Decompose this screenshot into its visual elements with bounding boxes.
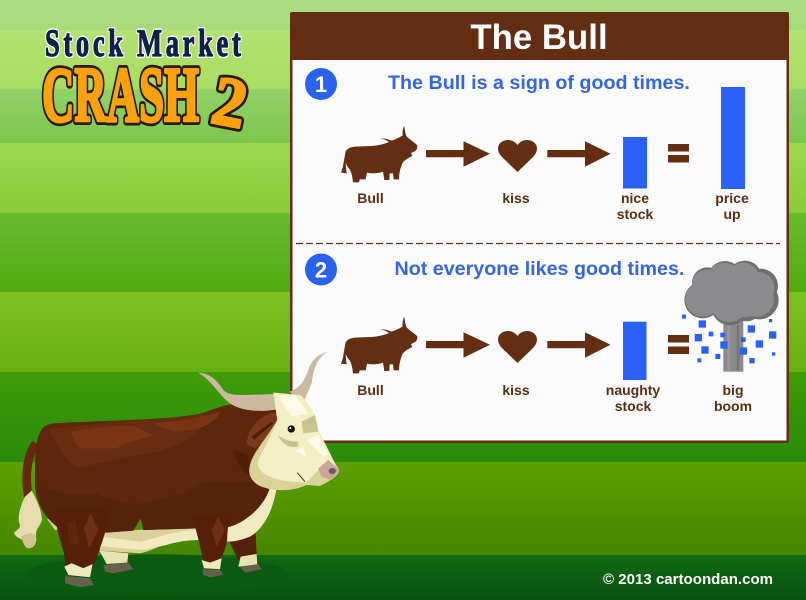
label: big boom: big <box>722 382 744 398</box>
bull illustration <box>14 352 339 594</box>
number badge 2: 2 <box>315 258 327 282</box>
label: kiss: kiss <box>502 190 530 206</box>
label: naughty stock: stock <box>615 398 651 414</box>
panel: The Bull <box>290 12 789 443</box>
label: naughty stock: naughty <box>606 382 660 398</box>
icon: bull silhouette <box>341 317 417 373</box>
arrow <box>547 332 610 358</box>
logo numeral 2: 2 <box>206 61 254 143</box>
game logo <box>42 22 254 143</box>
label: Bull: Bull <box>357 190 384 206</box>
bar: nice stock <box>623 137 647 188</box>
number badge 1 <box>305 68 337 100</box>
logo line: Stock Market: Stock Market <box>45 22 241 65</box>
section 2 <box>305 254 779 414</box>
equals sign <box>668 144 689 162</box>
copyright: © 2013 cartoondan.com <box>603 571 773 588</box>
arrow <box>426 332 490 358</box>
icon: bull silhouette <box>341 126 417 182</box>
equals sign <box>668 335 689 354</box>
bar: price up <box>721 87 745 189</box>
bar: naughty stock <box>623 322 646 380</box>
panel frame <box>290 12 789 443</box>
panel heading: The Bull <box>470 18 608 57</box>
section 1 heading: The Bull is a sign of good times. <box>388 72 690 94</box>
logo line: CRASH: CRASH <box>42 51 199 138</box>
arrow <box>547 141 610 167</box>
icon: heart <box>498 331 537 363</box>
icon: heart <box>498 140 537 172</box>
icon: explosion cloud <box>682 261 779 372</box>
section 1 <box>305 68 749 222</box>
label: nice stock: stock <box>617 206 653 222</box>
logo numeral 2, face: 2 <box>206 61 254 143</box>
number badge 2 <box>305 254 337 286</box>
logo line: Stock Market, weight: Stock Market <box>45 22 241 65</box>
label: kiss: kiss <box>502 382 530 398</box>
label: big boom: boom <box>714 398 752 414</box>
label: price up: price <box>715 190 749 206</box>
label: price up: up <box>723 206 741 222</box>
logo line: CRASH, face: CRASH <box>42 51 199 138</box>
arrow <box>426 141 490 167</box>
number badge 1: 1 <box>315 72 327 97</box>
label: Bull: Bull <box>357 382 384 398</box>
label: nice stock: nice <box>621 190 649 206</box>
panel body <box>292 60 786 440</box>
section 2 heading: Not everyone likes good times. <box>394 258 684 280</box>
